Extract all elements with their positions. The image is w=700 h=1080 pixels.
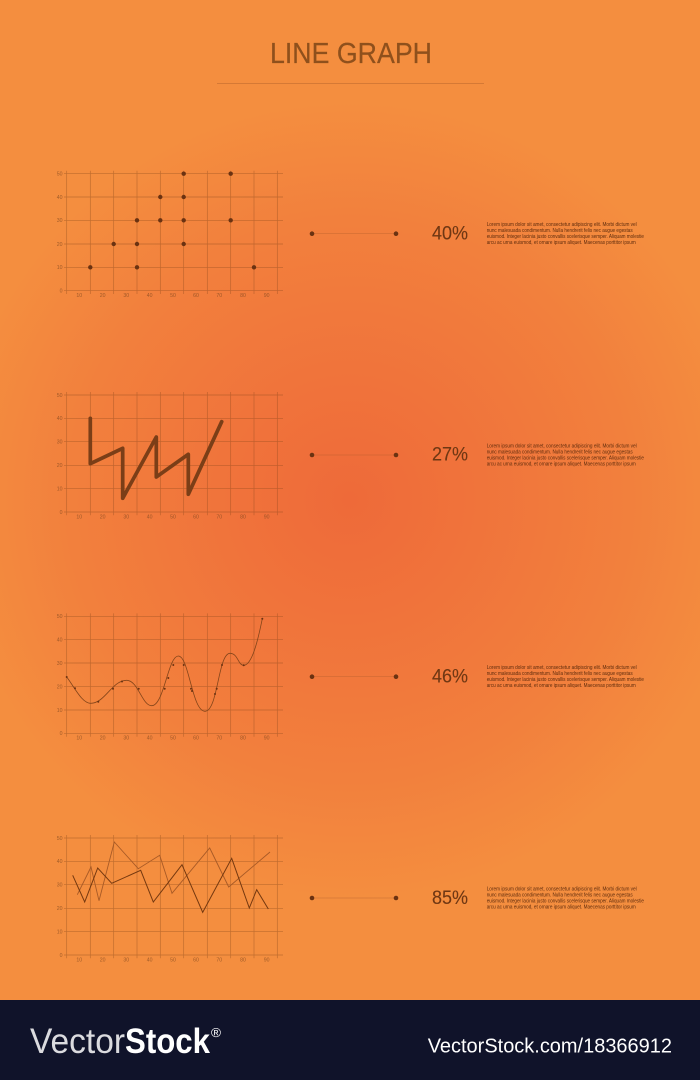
chart 3: smooth curve: 40 <box>57 638 63 644</box>
chart 2: zigzag line: 10 <box>76 514 82 520</box>
chart 3: smooth curve: 10 <box>57 708 63 714</box>
description 2: nunc malesuada condimentum. Nulla hendrerit felis nec augue egestas <box>487 450 633 456</box>
data points <box>88 172 256 269</box>
chart 1: dot plot: 60 <box>193 293 199 299</box>
title: LINE GRAPH <box>270 38 432 70</box>
description 3: euismod. Integer lacinia justo convallis scelerisque semper. Aliquam molestie <box>487 677 644 683</box>
description 4: euismod. Integer lacinia justo convallis scelerisque semper. Aliquam molestie <box>487 898 644 904</box>
chart 1: dot plot: 10 <box>57 265 63 271</box>
chart 2: zigzag line: 50 <box>57 393 63 399</box>
chart 4: two series line chart: 10 <box>76 957 82 963</box>
chart 3: smooth curve: 10 <box>76 736 82 742</box>
chart 4: two series line chart: 20 <box>57 906 63 912</box>
description 1: nunc malesuada condimentum. Nulla hendrerit felis nec augue egestas <box>487 228 633 234</box>
curve <box>67 619 262 711</box>
connector 4 <box>310 896 398 900</box>
chart 1: dot plot: 30 <box>57 218 63 224</box>
chart 3: smooth curve: 60 <box>193 736 199 742</box>
chart 2: zigzag line: 50 <box>170 514 176 520</box>
chart 2: zigzag line: 20 <box>100 514 106 520</box>
footer url: VectorStock.com/18366912 <box>428 1036 672 1058</box>
description 2: Lorem ipsum dolor sit amet, consectetur adipiscing elit. Morbi dictum vel <box>487 444 637 450</box>
chart 4: two series line chart: 30 <box>123 957 129 963</box>
chart 3: smooth curve: 50 <box>57 614 63 620</box>
percentage 4: 85% <box>432 887 468 909</box>
chart 1: dot plot: 20 <box>57 242 63 248</box>
chart 1: dot plot: 40 <box>57 195 63 201</box>
chart 3: smooth curve <box>57 613 283 742</box>
description 2 <box>487 444 644 468</box>
chart 3: smooth curve: 30 <box>57 661 63 667</box>
percentage 1: 40% <box>432 222 468 244</box>
chart 2: zigzag line: 0 <box>60 510 63 516</box>
percentage 2: 27% <box>432 444 468 466</box>
chart 2: zigzag line: 30 <box>57 439 63 445</box>
chart 4: two series line chart: 40 <box>147 957 153 963</box>
chart 4: two series line chart <box>57 835 283 963</box>
percentage 3: 46% <box>432 666 468 688</box>
chart 4: two series line chart: 10 <box>57 929 63 935</box>
footer bar <box>0 1000 700 1080</box>
chart 3: smooth curve: 30 <box>123 736 129 742</box>
footer logo <box>30 1022 221 1061</box>
chart 1: dot plot: 40 <box>147 293 153 299</box>
description 4: Lorem ipsum dolor sit amet, consectetur adipiscing elit. Morbi dictum vel <box>487 886 637 892</box>
dark series <box>73 858 268 912</box>
chart 1: dot plot: 50 <box>170 293 176 299</box>
connector 1 <box>310 231 398 236</box>
footer logo: Stock <box>125 1022 210 1061</box>
description 1 <box>487 222 644 246</box>
chart 3: smooth curve: 80 <box>240 736 246 742</box>
description 4 <box>487 886 644 910</box>
chart 4: two series line chart: 80 <box>240 957 246 963</box>
chart 4: two series line chart: 30 <box>57 882 63 888</box>
chart 3: smooth curve: 40 <box>147 736 153 742</box>
connector 2 <box>310 453 398 457</box>
chart 4: two series line chart: 40 <box>57 859 63 865</box>
data line <box>90 418 222 498</box>
chart 1: dot plot: 30 <box>123 293 129 299</box>
chart 2: zigzag line: 40 <box>57 416 63 422</box>
description 4: arcu ac urna euismod, et ornare ipsum aliquet. Maecenas porttitor ipsum <box>487 904 636 910</box>
chart 1: dot plot: 10 <box>76 293 82 299</box>
chart 2: zigzag line: 30 <box>123 514 129 520</box>
chart 3: smooth curve: 20 <box>57 684 63 690</box>
description 3: Lorem ipsum dolor sit amet, consectetur adipiscing elit. Morbi dictum vel <box>487 665 637 671</box>
chart 4: two series line chart: 90 <box>264 957 270 963</box>
description 1: Lorem ipsum dolor sit amet, consectetur adipiscing elit. Morbi dictum vel <box>487 222 637 228</box>
footer logo: ® <box>211 1025 221 1040</box>
light series <box>77 842 270 901</box>
description 2: arcu ac urna euismod, et ornare ipsum aliquet. Maecenas porttitor ipsum <box>487 462 636 468</box>
chart 2: zigzag line: 20 <box>57 463 63 469</box>
chart 1: dot plot <box>57 171 283 299</box>
chart 1: dot plot: 0 <box>60 288 63 294</box>
chart 4: two series line chart: 60 <box>193 957 199 963</box>
chart 2: zigzag line: 90 <box>264 514 270 520</box>
chart 2: zigzag line: 40 <box>147 514 153 520</box>
chart 1: dot plot: 50 <box>57 172 63 178</box>
description 1: arcu ac urna euismod, et ornare ipsum aliquet. Maecenas porttitor ipsum <box>487 240 636 246</box>
description 1: euismod. Integer lacinia justo convallis scelerisque semper. Aliquam molestie <box>487 234 644 240</box>
chart 1: dot plot: 90 <box>264 293 270 299</box>
description 3: arcu ac urna euismod, et ornare ipsum aliquet. Maecenas porttitor ipsum <box>487 683 636 689</box>
chart 3: smooth curve: 50 <box>170 736 176 742</box>
chart 2: zigzag line <box>57 392 283 520</box>
chart 3: smooth curve: 20 <box>100 736 106 742</box>
chart 2: zigzag line: 70 <box>216 514 222 520</box>
description 3 <box>487 665 644 689</box>
footer logo: Vector <box>30 1022 125 1061</box>
chart 4: two series line chart: 50 <box>170 957 176 963</box>
curve points <box>66 618 263 703</box>
chart 2: zigzag line: 60 <box>193 514 199 520</box>
chart 4: two series line chart: 70 <box>216 957 222 963</box>
description 4: nunc malesuada condimentum. Nulla hendrerit felis nec augue egestas <box>487 892 633 898</box>
connector 3 <box>310 674 398 679</box>
chart 2: zigzag line: 10 <box>57 486 63 492</box>
title rule <box>217 82 484 84</box>
description 3: nunc malesuada condimentum. Nulla hendrerit felis nec augue egestas <box>487 671 633 677</box>
chart 2: zigzag line: 80 <box>240 514 246 520</box>
chart 4: two series line chart: 0 <box>60 953 63 959</box>
chart 3: smooth curve: 90 <box>264 736 270 742</box>
chart 4: two series line chart: 50 <box>57 836 63 842</box>
chart 3: smooth curve: 0 <box>60 731 63 737</box>
chart 1: dot plot: 20 <box>100 293 106 299</box>
chart 1: dot plot: 70 <box>216 293 222 299</box>
chart 3: smooth curve: 70 <box>216 736 222 742</box>
chart 1: dot plot: 80 <box>240 293 246 299</box>
chart 4: two series line chart: 20 <box>100 957 106 963</box>
description 2: euismod. Integer lacinia justo convallis scelerisque semper. Aliquam molestie <box>487 456 644 462</box>
